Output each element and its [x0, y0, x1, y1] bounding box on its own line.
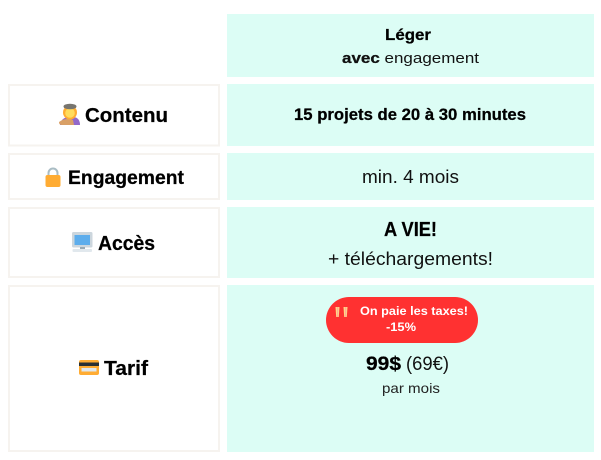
panel: cell Tarif: [227, 285, 594, 452]
text: téléchargements: + téléchargements!: [328, 248, 493, 269]
text: price: (69€): [406, 354, 449, 375]
label: Accès: Accès: [98, 233, 155, 255]
label: Contenu: Contenu: [85, 105, 168, 127]
panel: row label Accès: [9, 208, 219, 277]
text: discount: -15%: [386, 320, 416, 334]
panel: cell Accès: [227, 207, 594, 278]
panel: header Léger: [227, 14, 594, 77]
icon: credit card: [79, 360, 99, 375]
text: price: [366, 354, 449, 375]
callout: taxes badge: [326, 297, 478, 343]
panel: row label Contenu: [9, 85, 219, 146]
text: min. 4 mois: min. 4 mois: [362, 167, 459, 187]
text: A VIE!: A VIE!: [384, 219, 437, 241]
label: Tarif: Tarif: [104, 358, 148, 380]
text: price: 99$: [366, 354, 401, 375]
panel: row label Tarif: [9, 286, 219, 451]
text: par mois: par mois: [382, 380, 440, 396]
text: on paie les taxes: On paie les taxes!: [360, 304, 468, 318]
panel: cell Contenu: [227, 84, 594, 146]
icon: artist: [59, 104, 80, 125]
icon: computer: [72, 232, 92, 252]
panel: row label Engagement: [9, 154, 219, 199]
text: 15 projets: 15 projets de 20 à 30 minutes: [294, 106, 526, 124]
heading: Léger: Léger: [385, 27, 431, 44]
icon: lock: [46, 169, 60, 187]
icon: gift: [336, 307, 348, 317]
panel: cell Engagement: [227, 153, 594, 200]
text: avec engagement: avec engagement: [342, 50, 480, 67]
label: Engagement: Engagement: [68, 168, 185, 189]
